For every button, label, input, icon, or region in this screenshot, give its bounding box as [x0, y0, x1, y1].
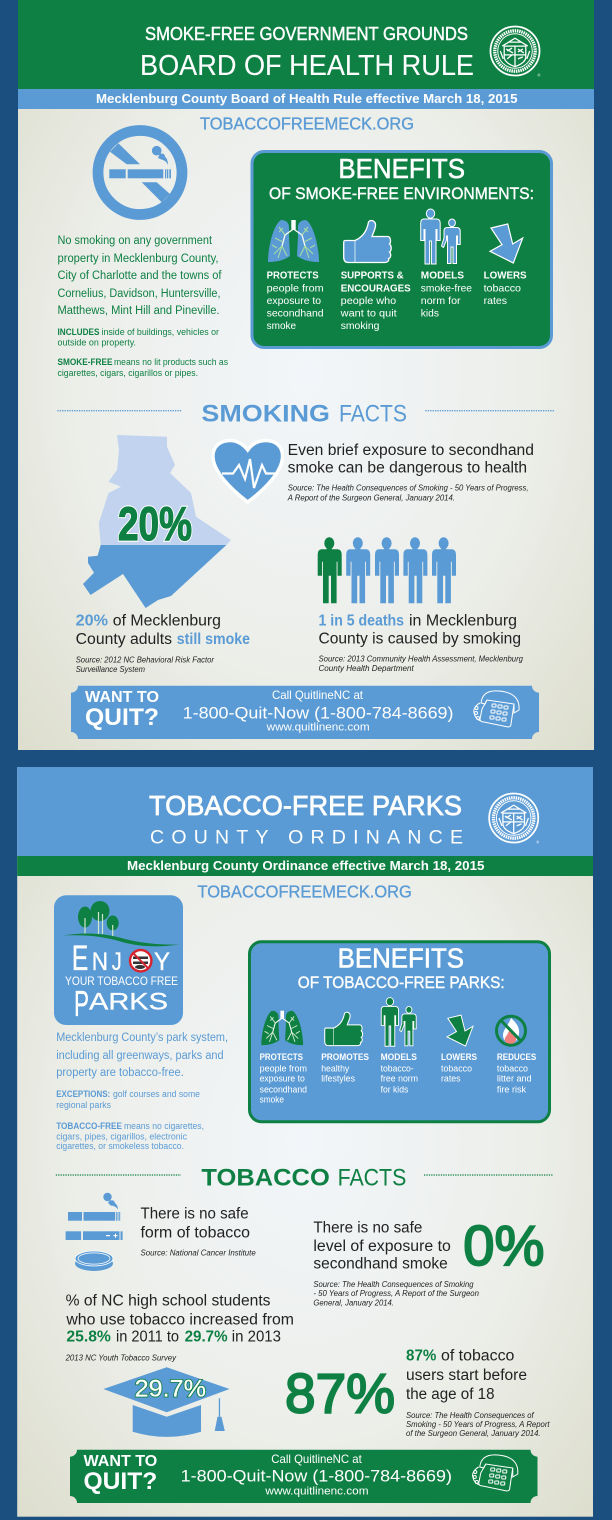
- icon: down arrow: [490, 224, 523, 263]
- benefit: lowers: LOWERS: [484, 270, 527, 282]
- fact: 87 percent start before 18: of the Surgeon General, January 2014.: [406, 1429, 541, 1438]
- text block: rule summary: outside on property.: [58, 338, 136, 348]
- heading: OF TOBACCO-FREE PARKS:: [298, 973, 505, 992]
- benefit: supports and encourages: [340, 270, 411, 332]
- fact: 87 percent start before 18: Smoking - 50 Years of Progress, A Report: [406, 1420, 550, 1429]
- benefit: protects: exposure to: [260, 1074, 305, 1084]
- icon: county seal: [490, 26, 541, 78]
- benefit: reduces: litter and: [497, 1074, 532, 1084]
- chart: county map 20 percent: 20%: [118, 497, 192, 550]
- icon: adult and child: [381, 998, 416, 1046]
- benefit: reduces: fire risk: [497, 1084, 527, 1094]
- benefit: protects: smoke: [260, 1094, 284, 1104]
- heading: smoking facts: [57, 401, 554, 428]
- text block: rule summary: cigarettes, cigars, cigarillos or pipes.: [58, 368, 198, 378]
- fact: no safe form of tobacco: [140, 1205, 256, 1258]
- fact: high school tobacco use: who use tobacco increased from: [65, 1311, 294, 1328]
- heading: OF SMOKE-FREE ENVIRONMENTS:: [269, 184, 534, 203]
- website link: TOBACCOFREEMECK.ORG: [198, 881, 412, 901]
- fact: no safe level of exposure: 0%: [463, 1214, 544, 1278]
- text block: rule summary: Cornelius, Davidson, Huntersville,: [58, 288, 220, 300]
- title: [140, 24, 474, 82]
- text block: rule summary: property in Mecklenburg County,: [58, 253, 218, 265]
- website link: TOBACCOFREEMECK.ORG: [200, 114, 414, 134]
- fact: high school tobacco use: [65, 1292, 294, 1363]
- benefit: lowers: rates: [484, 295, 507, 307]
- heading: tobacco facts: FACTS: [338, 1165, 406, 1192]
- benefit: supports and encourages: people who: [341, 295, 396, 307]
- banner: want to quit: [71, 686, 539, 739]
- benefit: promotes: [321, 1052, 369, 1084]
- benefit: supports and encourages: smoking: [341, 320, 380, 332]
- effective date strip: [18, 89, 594, 109]
- badge lettering: [65, 939, 178, 1024]
- benefit: reduces: REDUCES: [497, 1052, 536, 1062]
- badge lettering: ARKS: [89, 988, 168, 1015]
- fact: 87 percent start before 18: the age of 18: [406, 1386, 494, 1403]
- badge lettering: E: [72, 939, 88, 978]
- icon: no tobacco in the letter O: [130, 950, 151, 971]
- benefit: models: tobacco-: [381, 1063, 414, 1073]
- benefit: protects: people from: [267, 283, 324, 295]
- text block: rule summary: means no lit products such as: [114, 357, 228, 367]
- benefit: models: for kids: [381, 1084, 409, 1094]
- badge lettering: Y: [154, 948, 170, 976]
- badge lettering: YOUR TOBACCO FREE: [65, 974, 178, 988]
- heading: smoking facts: FACTS: [339, 401, 407, 428]
- fact: secondhand smoke: [287, 442, 534, 503]
- effective date strip: [17, 856, 593, 876]
- text block: ordinance summary: cigarettes, or smokeless tobacco.: [56, 1141, 184, 1151]
- banner: want to quit: WANT TO: [85, 689, 159, 706]
- title: SMOKE-FREE GOVERNMENT GROUNDS: [145, 24, 468, 44]
- icon: county seal: [489, 793, 539, 844]
- fact: 87 percent start before 18: 87%: [406, 1348, 437, 1365]
- icon: thumbs up: [325, 1012, 363, 1046]
- fact: 20 percent of adults smoke: County adults: [76, 631, 172, 648]
- benefit: promotes: healthy: [321, 1063, 350, 1073]
- banner: want to quit: Call QuitlineNC at: [272, 688, 364, 702]
- fact: high school tobacco use: 2013 NC Youth Tobacco Survey: [65, 1354, 177, 1363]
- fact: secondhand smoke: Even brief exposure to secondhand: [288, 442, 534, 459]
- badge lettering: N: [92, 948, 108, 976]
- banner: want to quit: www.quitlinenc.com: [264, 1486, 368, 1498]
- fact: no safe form of tobacco: There is no safe: [140, 1205, 249, 1222]
- icon: heart with pulse: [213, 440, 282, 502]
- text block: rule summary: INCLUDES: [58, 327, 100, 337]
- fact: 1 in 5 deaths: 1 in 5 deaths: [318, 613, 404, 630]
- title: TOBACCO-FREE PARKS: [149, 790, 462, 821]
- banner: want to quit: WANT TO: [84, 1453, 157, 1470]
- fact: 87 percent start before 18: 87%: [285, 1362, 395, 1425]
- heading: [269, 153, 534, 203]
- benefit: promotes: PROMOTES: [321, 1052, 369, 1062]
- effective date strip: Mecklenburg County Board of Health Rule effective March 18, 2015: [96, 91, 518, 106]
- fact: no safe form of tobacco: form of tobacco: [140, 1224, 250, 1241]
- benefit: models: MODELS: [421, 270, 464, 282]
- fact: 87 percent start before 18: [285, 1348, 550, 1438]
- fact: high school tobacco use: in 2013: [232, 1329, 281, 1346]
- fact: 1 in 5 deaths: County Health Department: [318, 664, 415, 673]
- fact: no safe form of tobacco: Source: National Cancer Institute: [140, 1249, 256, 1258]
- benefit: protects: [267, 270, 324, 332]
- chart: 1 in 5 people pictogram: [318, 537, 456, 603]
- heading: BENEFITS: [338, 942, 464, 973]
- fact: no safe level of exposure: - 50 Years of Progress, A Report of the Surgeon: [313, 1289, 479, 1298]
- chart: county map 20 percent: 20%: [118, 497, 192, 550]
- benefit: models: norm for: [421, 295, 461, 307]
- benefit: models: MODELS: [381, 1052, 417, 1062]
- text block: rule summary: [58, 235, 228, 378]
- fact: 1 in 5 deaths: [318, 613, 524, 673]
- icon: telephone: [474, 691, 519, 727]
- benefit: supports and encourages: SUPPORTS &: [341, 270, 404, 282]
- benefit: promotes: lifestyles: [321, 1074, 355, 1084]
- fact: no safe level of exposure: level of exposure to: [313, 1238, 451, 1255]
- benefit: protects: exposure to: [267, 295, 321, 307]
- text block: ordinance summary: TOBACCO-FREE: [56, 1121, 122, 1131]
- heading: tobacco facts: TOBACCO: [201, 1165, 330, 1192]
- text block: ordinance summary: including all greenways, parks and: [56, 1050, 224, 1062]
- badge: enjoy your tobacco free parks: [54, 895, 183, 1025]
- text block: rule summary: inside of buildings, vehicles or: [102, 327, 219, 337]
- badge lettering: J: [112, 948, 122, 976]
- header band: [18, 0, 594, 89]
- benefit: lowers: rates: [441, 1074, 461, 1084]
- fact: no safe level of exposure: secondhand smoke: [313, 1255, 448, 1272]
- benefit: supports and encourages: ENCOURAGES: [341, 283, 411, 295]
- panel: tobacco-free parks: [17, 767, 593, 1517]
- benefit: reduces: [497, 1052, 536, 1094]
- benefit: protects: PROTECTS: [267, 270, 319, 282]
- benefit: protects: smoke: [267, 320, 296, 332]
- title: BOARD OF HEALTH RULE: [140, 50, 474, 82]
- text block: ordinance summary: EXCEPTIONS:: [56, 1089, 110, 1099]
- text block: rule summary: No smoking on any government: [58, 235, 213, 247]
- fact: 87 percent start before 18: users start before: [406, 1367, 527, 1384]
- benefit: reduces: tobacco: [497, 1063, 528, 1073]
- benefit: protects: PROTECTS: [260, 1052, 303, 1062]
- benefit: models: [421, 270, 472, 320]
- banner: want to quit: QUIT?: [84, 1468, 157, 1495]
- icon: no smoking: [98, 130, 182, 214]
- text block: ordinance summary: means no cigarettes,: [124, 1121, 204, 1131]
- text block: rule summary: City of Charlotte and the towns of: [58, 270, 222, 282]
- chart: county map 20 percent: [83, 435, 231, 608]
- effective date strip: Mecklenburg County Ordinance effective March 18, 2015: [127, 858, 484, 873]
- panel: benefits of tobacco-free parks: [250, 942, 550, 1122]
- panel: smoke-free government grounds: [18, 0, 594, 750]
- banner: want to quit: 1-800-Quit-Now (1-800-784-8669): [181, 1467, 452, 1486]
- benefit: protects: people from: [260, 1063, 307, 1073]
- benefit: models: free norm: [381, 1074, 418, 1084]
- benefit: lowers: [441, 1052, 477, 1084]
- fact: 20 percent of adults smoke: Source: 2012 NC Behavioral Risk Factor: [76, 656, 214, 665]
- benefit: lowers: tobacco: [441, 1063, 472, 1073]
- benefit: supports and encourages: want to quit: [340, 308, 397, 320]
- fact: high school tobacco use: in 2011 to: [116, 1329, 179, 1346]
- banner: want to quit: www.quitlinenc.com: [266, 722, 370, 734]
- banner: want to quit: QUIT?: [85, 704, 159, 731]
- fact: 87 percent start before 18: Source: The Health Consequences of: [406, 1411, 534, 1420]
- fact: high school tobacco use: % of NC high school students: [66, 1292, 271, 1309]
- fact: no safe level of exposure: [313, 1214, 544, 1308]
- icon: telephone: [473, 1455, 518, 1491]
- heading: tobacco facts: [56, 1165, 554, 1192]
- fact: high school tobacco use: 29.7%: [185, 1329, 228, 1346]
- text block: ordinance summary: golf courses and some: [113, 1089, 200, 1099]
- icon: no fire: [496, 1016, 526, 1045]
- text block: rule summary: Matthews, Mint Hill and Pineville.: [58, 305, 220, 317]
- header band: [17, 767, 593, 856]
- fact: 87 percent start before 18: of tobacco: [441, 1348, 514, 1365]
- text block: ordinance summary: [56, 1032, 228, 1151]
- benefit: lowers: LOWERS: [441, 1052, 477, 1062]
- icon: graduation cap 29.7 percent: [103, 1367, 230, 1437]
- banner: want to quit: 1-800-Quit-Now (1-800-784-8669): [183, 703, 453, 722]
- benefit: protects: secondhand: [260, 1084, 307, 1094]
- panel: benefits of smoke-free environments: [252, 152, 552, 348]
- fact: 20 percent of adults smoke: [76, 613, 250, 674]
- fact: no safe level of exposure: Source: The Health Consequences of Smoking: [313, 1280, 474, 1289]
- icon: lungs: [268, 220, 319, 262]
- icon: trees on hill: [63, 901, 179, 946]
- fact: 1 in 5 deaths: County is caused by smoking: [318, 630, 521, 647]
- icon: graduation cap 29.7 percent: 29.7%: [135, 1376, 206, 1403]
- text block: ordinance summary: Mecklenburg County’s park system,: [56, 1032, 228, 1044]
- fact: no safe level of exposure: There is no safe: [313, 1219, 422, 1236]
- fact: 1 in 5 deaths: Source: 2013 Community Health Assessment, Mecklenburg: [318, 655, 524, 664]
- benefit: protects: [260, 1052, 307, 1104]
- banner: want to quit: Call QuitlineNC at: [271, 1452, 362, 1466]
- fact: high school tobacco use: 25.8%: [66, 1329, 111, 1346]
- banner: want to quit: [70, 1450, 538, 1503]
- fact: secondhand smoke: Source: The Health Consequences of Smoking - 50 Years of Progress,: [288, 484, 528, 493]
- icon: graduation cap 29.7 percent: 29.7%: [135, 1376, 206, 1403]
- fact: 20 percent of adults smoke: of Mecklenburg: [113, 613, 221, 630]
- title: COUNTY ORDINANCE: [150, 826, 463, 848]
- benefit: models: smoke-free: [421, 283, 472, 295]
- benefit: lowers: tobacco: [484, 283, 521, 295]
- fact: 20 percent of adults smoke: still smoke: [177, 631, 250, 648]
- icon: down arrow: [447, 1015, 473, 1046]
- benefit: models: kids: [421, 308, 439, 320]
- benefit: models: [381, 1052, 418, 1094]
- text block: ordinance summary: property are tobacco-free.: [56, 1067, 184, 1079]
- title: [149, 790, 463, 848]
- heading: smoking facts: SMOKING: [201, 401, 330, 428]
- heading: [298, 942, 505, 992]
- fact: secondhand smoke: A Report of the Surgeon General, January 2014.: [287, 494, 455, 503]
- icon: lungs: [261, 1011, 303, 1045]
- icon: adult and child: [421, 209, 460, 264]
- fact: secondhand smoke: smoke can be dangerous to health: [288, 459, 527, 476]
- text block: rule summary: SMOKE-FREE: [58, 357, 112, 367]
- fact: 20 percent of adults smoke: 20%: [76, 613, 108, 630]
- benefit: lowers: [484, 270, 527, 307]
- fact: 20 percent of adults smoke: Surveillance System: [76, 665, 145, 674]
- icon: cigarette, e-cigarette and snuff tin: [66, 1193, 123, 1271]
- badge lettering: P: [74, 983, 89, 1024]
- icon: thumbs up: [344, 221, 391, 262]
- text block: ordinance summary: regional parks: [56, 1100, 111, 1110]
- heading: BENEFITS: [338, 153, 465, 184]
- text block: ordinance summary: cigars, pipes, cigarillos, electronic: [56, 1131, 187, 1141]
- fact: 1 in 5 deaths: in Mecklenburg: [409, 613, 517, 630]
- fact: no safe level of exposure: General, January 2014.: [313, 1299, 394, 1308]
- benefit: protects: secondhand: [267, 308, 324, 320]
